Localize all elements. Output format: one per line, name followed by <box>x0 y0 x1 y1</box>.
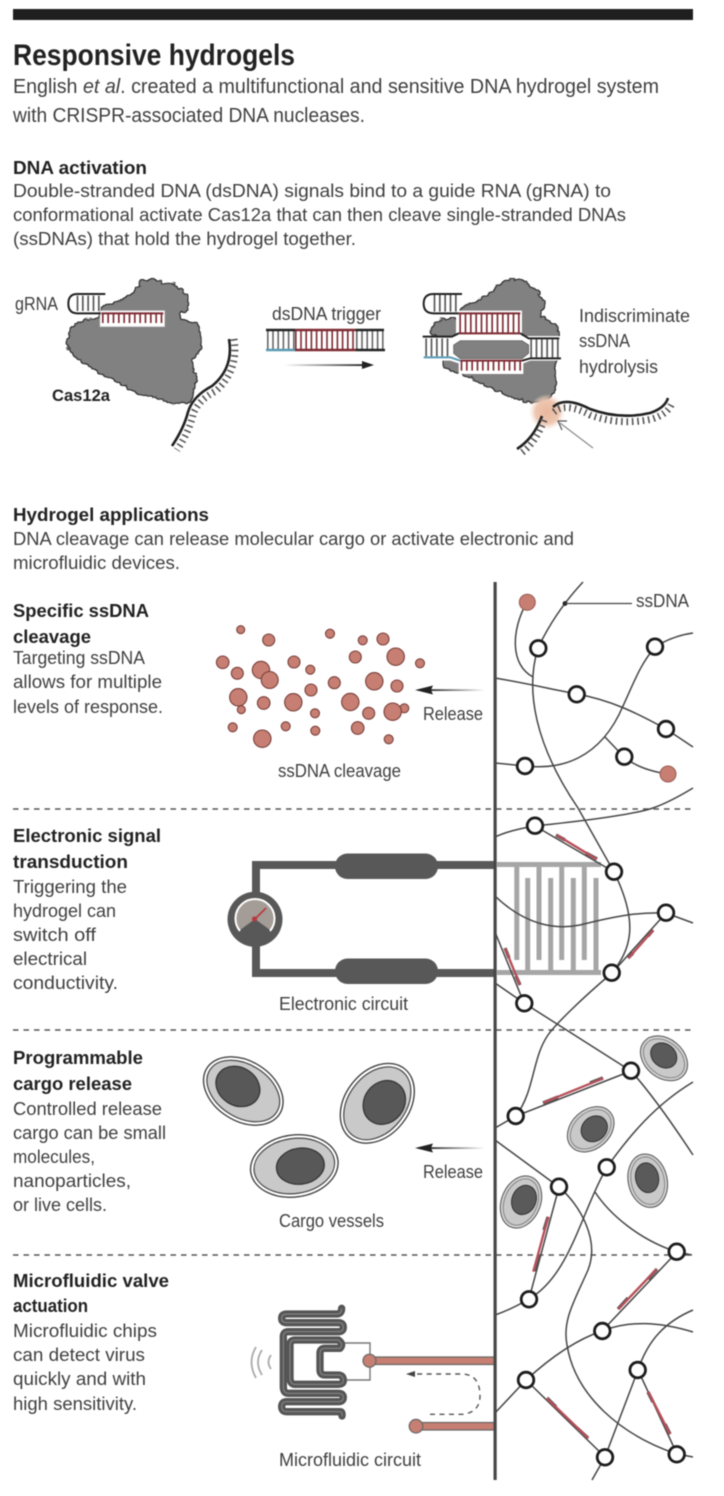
diagram: microfluidic circuit <box>252 1308 495 1433</box>
circuit wires <box>256 865 495 973</box>
label: Indiscriminate ssDNA hydrolysis: hydrolysis <box>579 356 658 377</box>
label: dsDNA trigger: dsDNA trigger <box>272 303 381 324</box>
label: Electronic circuit: Electronic circuit <box>279 993 408 1014</box>
label: Cargo vessels: Cargo vessels <box>279 1210 384 1231</box>
icon: meter <box>228 892 282 947</box>
text: Hydrogel applications description <box>13 528 574 573</box>
icon: vessel 2 <box>325 1049 430 1158</box>
panel: electronic signal transduction text: electrical <box>13 948 87 969</box>
icon: activated duplex <box>423 294 561 374</box>
title: Responsive hydrogels <box>13 39 295 72</box>
intro text <box>12 76 659 127</box>
label: gRNA: gRNA <box>15 293 59 314</box>
arrow: release <box>415 1144 485 1152</box>
heading: Hydrogel applications: Hydrogel applications <box>13 504 209 525</box>
panel: programmable cargo release text: molecules, <box>13 1146 95 1167</box>
panel: microfluidic valve actuation text: actuation <box>13 1295 88 1316</box>
label: Release: Release <box>423 703 483 724</box>
channel: lower <box>409 1419 495 1433</box>
label: Indiscriminate ssDNA hydrolysis: ssDNA <box>579 330 631 351</box>
panel: electronic signal transduction text: switch off <box>13 924 97 945</box>
top rule <box>13 9 693 20</box>
panel: electronic signal transduction text <box>13 825 161 993</box>
ssDNA strands <box>495 582 693 1480</box>
panel: programmable cargo release text: Controlled release <box>13 1098 162 1119</box>
callout: ssDNA: ssDNA <box>636 590 690 611</box>
panel: electronic signal transduction text: hydrogel can <box>13 900 116 921</box>
label: Indiscriminate ssDNA hydrolysis: Indiscriminate <box>579 305 690 326</box>
panel: microfluidic valve actuation text: Microfluidic chips <box>13 1320 157 1341</box>
label: Microfluidic circuit: Microfluidic circuit <box>279 1449 421 1470</box>
icon: serpentine channel <box>282 1308 343 1416</box>
icon: cleaved ssDNA strands <box>517 398 672 454</box>
arrow: cleavage pointer <box>558 421 593 448</box>
icon: ssDNA strand <box>172 339 235 450</box>
row dividers <box>13 809 693 1255</box>
panel: programmable cargo release text <box>13 1047 166 1215</box>
label: ssDNA cleavage: ssDNA cleavage <box>278 760 401 781</box>
panel: programmable cargo release text: cargo release <box>13 1073 132 1094</box>
icon: cleavage glow <box>529 394 565 430</box>
intro text: English et al. created a multifunctional and sensitive DNA hydrogel system <box>13 76 659 98</box>
icon: dsDNA duplex <box>266 330 385 350</box>
label: Cas12a: Cas12a <box>52 386 111 405</box>
diagram: dsDNA trigger <box>266 303 385 369</box>
nodes <box>508 639 684 1465</box>
label: Release: Release <box>423 1161 483 1182</box>
text: DNA activation description: (ssDNAs) that hold the hydrogel together. <box>13 228 356 249</box>
diagram: Cas12a with gRNA <box>15 280 235 450</box>
icon: activated Cas12a protein <box>429 280 559 403</box>
text: DNA activation description <box>13 180 626 249</box>
panel: specific ssDNA cleavage text <box>13 600 163 717</box>
icon: Cas12a protein <box>67 280 202 403</box>
text: Hydrogel applications description: DNA cleavage can release molecular cargo or activate electronic and <box>13 528 574 549</box>
electrode <box>497 862 601 975</box>
text: DNA activation description: conformational activate Cas12a that can then cleave single-stranded DNAs <box>13 204 626 225</box>
label: Indiscriminate ssDNA hydrolysis <box>579 305 690 377</box>
panel: electronic signal transduction text: transduction <box>13 851 128 872</box>
circuit resistors <box>335 854 438 984</box>
callout: ssDNA <box>563 590 690 611</box>
panel: specific ssDNA cleavage text: cleavage <box>13 626 91 647</box>
panel: microfluidic valve actuation text: can detect virus <box>13 1344 145 1365</box>
icon: vessel 3 <box>246 1129 342 1203</box>
panel: specific ssDNA cleavage text: levels of response. <box>13 696 163 717</box>
panel: ssDNA cleavage particles <box>216 626 424 747</box>
diagram: electronic circuit <box>228 854 495 984</box>
panel: specific ssDNA cleavage text: Specific ssDNA <box>13 600 149 621</box>
vertical divider <box>494 582 497 1480</box>
panel: microfluidic valve actuation text: Microfluidic valve <box>13 1270 169 1291</box>
arrow: dashed return flow <box>406 1371 480 1414</box>
panel: electronic signal transduction text: Electronic signal <box>13 825 161 846</box>
diagram: activated Cas12a <box>423 280 690 454</box>
icon: vessel 1 <box>191 1043 296 1139</box>
panel: electronic signal transduction text: Triggering the <box>13 876 127 897</box>
network cargo vessels <box>493 1027 696 1234</box>
panel: hydrogel network <box>493 582 696 1480</box>
heading: DNA activation: DNA activation <box>13 157 147 178</box>
cleavage segments <box>505 835 670 1438</box>
panel: microfluidic valve actuation text: high sensitivity. <box>13 1393 137 1414</box>
panel: programmable cargo release text: nanoparticles, <box>13 1170 131 1191</box>
end caps <box>519 594 676 782</box>
panel: specific ssDNA cleavage text: allows for multiple <box>13 671 162 692</box>
panel: electronic signal transduction text: conductivity. <box>13 972 118 993</box>
diagram: cargo vessels <box>191 1043 430 1203</box>
text: DNA activation description: Double-stranded DNA (dsDNA) signals bind to a guide RNA (gRNA) to <box>13 180 611 201</box>
intro text: with CRISPR-associated DNA nucleases. <box>12 105 365 127</box>
panel: programmable cargo release text: or live cells. <box>13 1194 107 1215</box>
panel: programmable cargo release text: Programmable <box>13 1047 143 1068</box>
panel: microfluidic valve actuation text <box>13 1270 169 1414</box>
panel: specific ssDNA cleavage text: Targeting ssDNA <box>13 647 146 668</box>
connector wires <box>343 1343 370 1380</box>
arrow: dsDNA trigger <box>284 361 374 369</box>
icon: gRNA hairpin <box>68 294 165 327</box>
channel: upper <box>363 1354 495 1367</box>
panel: programmable cargo release text: cargo can be small <box>13 1122 166 1143</box>
text: Hydrogel applications description: microfluidic devices. <box>13 552 180 573</box>
icon: signal waves <box>252 1347 271 1378</box>
arrow: release <box>415 686 485 694</box>
panel: microfluidic valve actuation text: quickly and with <box>13 1368 146 1389</box>
